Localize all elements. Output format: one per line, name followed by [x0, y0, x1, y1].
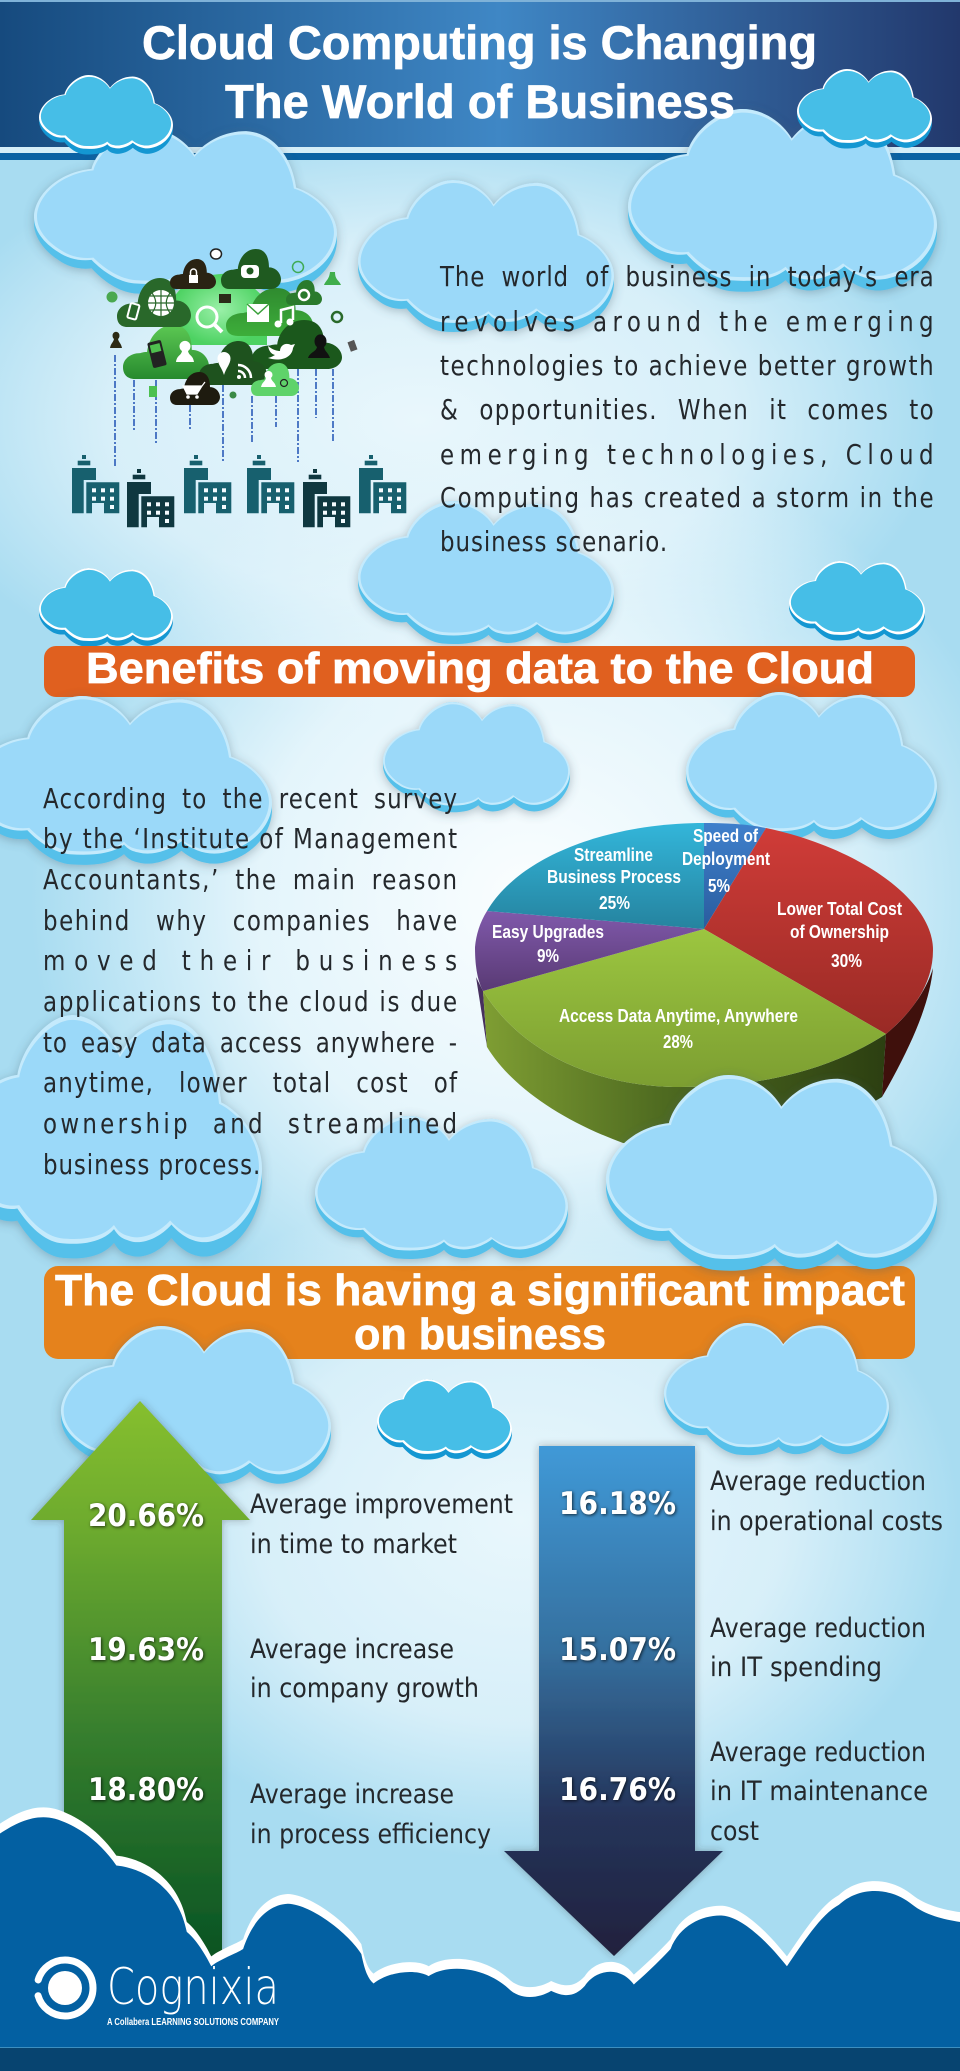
right column: percentage values and labels: in IT spending [710, 1652, 882, 1683]
left column: percentage values and labels: Average improvement [250, 1489, 513, 1520]
survey paragraph: by the ‘Institute of Management [43, 823, 457, 856]
survey paragraph: moved their business [43, 945, 457, 978]
survey paragraph: business process. [43, 1149, 260, 1182]
right column: percentage values and labels [559, 1466, 943, 1847]
blue down arrow [504, 1446, 723, 1956]
left column: percentage values and labels: 18.80% [88, 1772, 204, 1808]
right column: percentage values and labels: Average reduction [710, 1737, 926, 1768]
large background clouds: middle section, upper row [0, 692, 937, 1259]
right column: percentage values and labels: 16.76% [559, 1772, 676, 1808]
right column: percentage values and labels: Average reduction [710, 1466, 926, 1497]
data lines [115, 355, 333, 467]
survey paragraph: applications to the cloud is due [43, 986, 457, 1019]
pie labels: Lower Total Cost [777, 898, 902, 919]
slice: lower total cost of ownership [704, 828, 933, 1034]
pie labels: 28% [663, 1031, 693, 1052]
pie labels [492, 825, 902, 1052]
pie labels: Easy Upgrades [492, 921, 604, 942]
left column: percentage values and labels: 20.66% [88, 1498, 204, 1534]
header banner [0, 0, 960, 160]
pie labels: 30% [831, 950, 862, 971]
survey paragraph: anytime, lower total cost of [43, 1067, 458, 1100]
slice: streamline business process [487, 823, 704, 929]
pie labels: Business Process [547, 866, 681, 887]
right column: percentage values and labels: Average reduction [710, 1613, 926, 1644]
title: Cloud Computing is Changing [142, 16, 817, 69]
large background clouds: top section [34, 109, 937, 644]
left column: percentage values and labels: 19.63% [88, 1632, 204, 1668]
intro paragraph: emerging technologies, Cloud [440, 439, 934, 472]
right column: percentage values and labels: in IT maintenance [710, 1776, 928, 1807]
intro paragraph [439, 261, 934, 559]
right column: percentage values and labels: 15.07% [559, 1632, 676, 1668]
city buildings [72, 455, 406, 527]
icon clouds [117, 249, 342, 405]
pie labels: 5% [708, 875, 730, 896]
pie labels: Streamline [574, 844, 653, 865]
satellite icons [106, 292, 118, 302]
survey paragraph: Accountants,’ the main reason [43, 864, 457, 897]
pie labels: 25% [599, 892, 630, 913]
left column: percentage values and labels [88, 1489, 513, 1850]
heading bar: benefits: Benefits of moving data to the Cloud [86, 644, 874, 693]
survey paragraph: to easy data access anywhere - [43, 1027, 457, 1060]
pie side walls [476, 968, 933, 1144]
left column: percentage values and labels: Average increase [250, 1779, 454, 1810]
pie labels: Access Data Anytime, Anywhere [559, 1005, 798, 1026]
heading bar: impact: on business [354, 1310, 606, 1359]
left column: percentage values and labels: Average increase [250, 1634, 454, 1665]
icon glyphs [106, 249, 357, 399]
logo mark [37, 1960, 93, 2016]
illustration: cloud network raining data on city buildings [72, 249, 406, 527]
pie labels: of Ownership [790, 921, 889, 942]
pie labels: Deployment [682, 848, 770, 869]
right column: percentage values and labels: cost [710, 1816, 759, 1847]
survey paragraph [43, 783, 458, 1182]
intro paragraph: technologies to achieve better growth [440, 350, 934, 383]
intro paragraph: revolves around the emerging [440, 306, 934, 339]
large cloud overlapping pie chart [606, 1075, 937, 1271]
intro paragraph: & opportunities. When it comes to [440, 394, 934, 427]
green up arrow [31, 1401, 250, 1965]
survey paragraph: According to the recent survey [43, 783, 457, 816]
intro paragraph: business scenario. [440, 526, 667, 559]
clouds: impact section [61, 1323, 889, 1485]
3D pie chart: reasons for moving to the cloud [475, 823, 933, 1144]
heading bar: impact [44, 1266, 915, 1359]
intro paragraph: Computing has created a storm in the [440, 482, 934, 515]
survey paragraph: ownership and streamlined [43, 1108, 457, 1141]
slice: speed of deployment [704, 823, 766, 929]
slice: easy upgrades [475, 911, 704, 991]
pie labels: Speed of [693, 825, 759, 846]
footer cloud band [0, 1807, 960, 2071]
survey paragraph: behind why companies have [43, 905, 457, 938]
title: The World of Business [225, 75, 735, 128]
logo tagline: A Collabera LEARNING SOLUTIONS COMPANY [107, 2017, 279, 2028]
heading bar: impact: The Cloud is having a significant impact [55, 1266, 905, 1315]
left column: percentage values and labels: in process efficiency [250, 1819, 491, 1850]
Cognixia logo [37, 1958, 279, 2028]
logo wordmark: Cognixia [107, 1958, 279, 2016]
intro paragraph: The world of business in today’s era [439, 261, 934, 294]
small bright clouds: top section [39, 69, 932, 646]
left column: percentage values and labels: in time to market [250, 1529, 457, 1560]
title [142, 16, 817, 128]
right column: percentage values and labels: 16.18% [559, 1486, 676, 1522]
slice: access data anytime [483, 929, 886, 1087]
pie labels: 9% [537, 945, 559, 966]
left column: percentage values and labels: in company growth [250, 1673, 479, 1704]
